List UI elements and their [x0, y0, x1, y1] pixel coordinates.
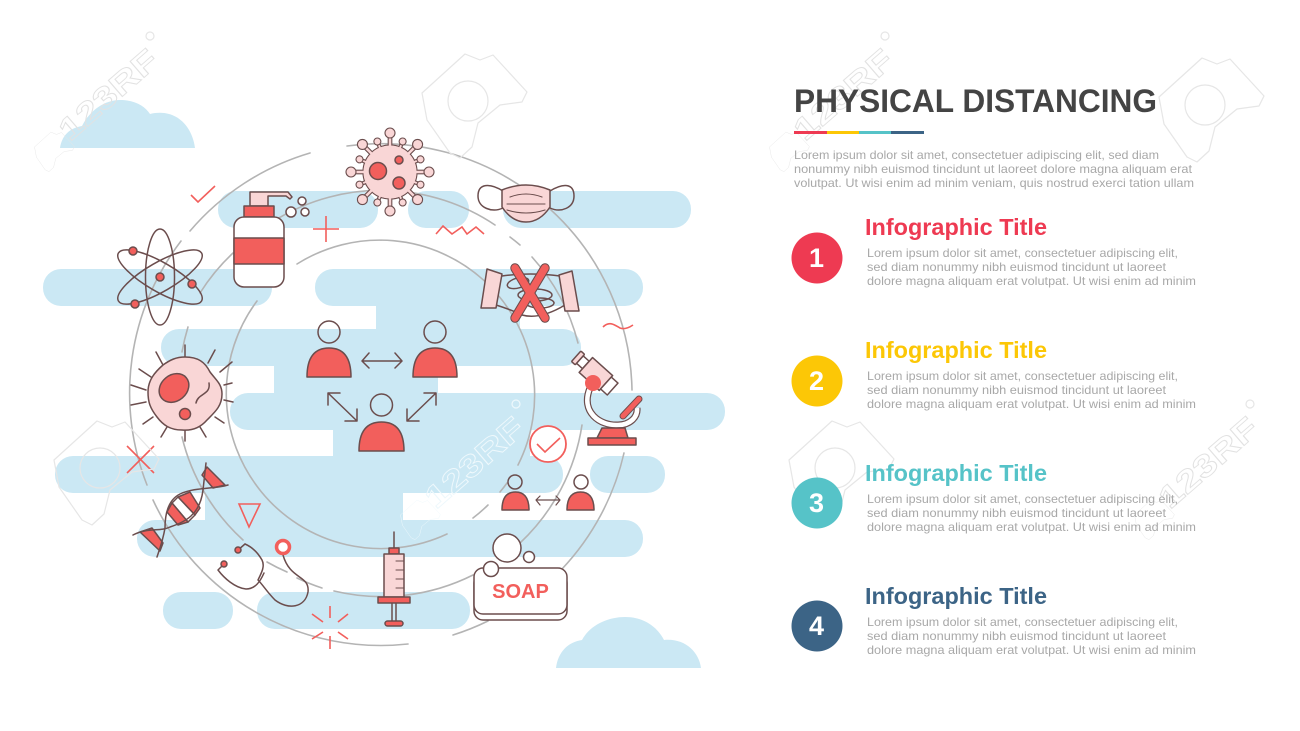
item 3: sed diam nonummy nibh euismod tincidunt ut laoreet [867, 506, 1167, 520]
item 3 [792, 460, 1196, 534]
item 2: Infographic Title [865, 337, 1047, 363]
intro paragraph: volutpat. Ut wisi enim ad minim veniam, quis nostrud exerci tation ullam [794, 176, 1194, 190]
watermarks: 123RF [787, 42, 900, 147]
item 2: 2 [809, 366, 824, 396]
item 4: 4 [809, 611, 824, 641]
title colour underline [794, 131, 924, 134]
icon: soap bar: SOAP [492, 581, 549, 603]
item 4: dolore magna aliquam erat volutpat. Ut wisi enim ad minim [867, 643, 1196, 657]
item 3: Infographic Title [865, 460, 1047, 486]
watermarks [35, 32, 1265, 540]
item 4: Lorem ipsum dolor sit amet, consectetuer adipiscing elit, [867, 615, 1178, 629]
item 2: sed diam nonummy nibh euismod tincidunt ut laoreet [867, 383, 1167, 397]
icon: atom [111, 229, 209, 325]
watermarks: 123RF [52, 42, 165, 147]
icon: check badge [530, 426, 566, 462]
icon: stethoscope [218, 540, 308, 606]
item 1: dolore magna aliquam erat volutpat. Ut wisi enim ad minim [867, 274, 1196, 288]
item 4: sed diam nonummy nibh euismod tincidunt ut laoreet [867, 629, 1167, 643]
item 4 [792, 583, 1196, 657]
item 3: dolore magna aliquam erat volutpat. Ut wisi enim ad minim [867, 520, 1196, 534]
icon: microscope [570, 349, 639, 445]
central people keeping distance [307, 321, 457, 451]
watermarks: 123RF [418, 410, 531, 515]
icon: cell [131, 345, 233, 441]
item 1: 1 [809, 243, 824, 273]
intro paragraph: Lorem ipsum dolor sit amet, consectetuer adipiscing elit, sed diam [794, 148, 1159, 162]
icon: virus [346, 128, 434, 216]
icon: soap bar [474, 534, 567, 620]
icon: face mask [478, 185, 574, 222]
icon: pump bottle [234, 192, 309, 287]
small people with distance arrow [502, 475, 594, 510]
item 2: Lorem ipsum dolor sit amet, consectetuer adipiscing elit, [867, 369, 1178, 383]
decorative red marks [127, 186, 633, 649]
background blue cloud and bar shapes [43, 100, 838, 668]
title: PHYSICAL DISTANCING [794, 83, 1157, 119]
icon: DNA helix [133, 463, 228, 557]
item 2: dolore magna aliquam erat volutpat. Ut wisi enim ad minim [867, 397, 1196, 411]
item 1 [792, 214, 1196, 288]
item 1: sed diam nonummy nibh euismod tincidunt ut laoreet [867, 260, 1167, 274]
item 1: Infographic Title [865, 214, 1047, 240]
item 3: Lorem ipsum dolor sit amet, consectetuer adipiscing elit, [867, 492, 1178, 506]
item 2 [792, 337, 1196, 411]
intro paragraph [794, 148, 1194, 190]
item 3: 3 [809, 488, 824, 518]
item 1: Lorem ipsum dolor sit amet, consectetuer adipiscing elit, [867, 246, 1178, 260]
icon: handshake crossed out [481, 268, 579, 318]
item 4: Infographic Title [865, 583, 1047, 609]
intro paragraph: nonummy nibh euismod tincidunt ut laoreet dolore magna aliquam erat [794, 162, 1193, 176]
concentric broken rings [130, 144, 632, 645]
icon: syringe [378, 532, 410, 626]
watermarks: 123RF [1152, 410, 1265, 515]
